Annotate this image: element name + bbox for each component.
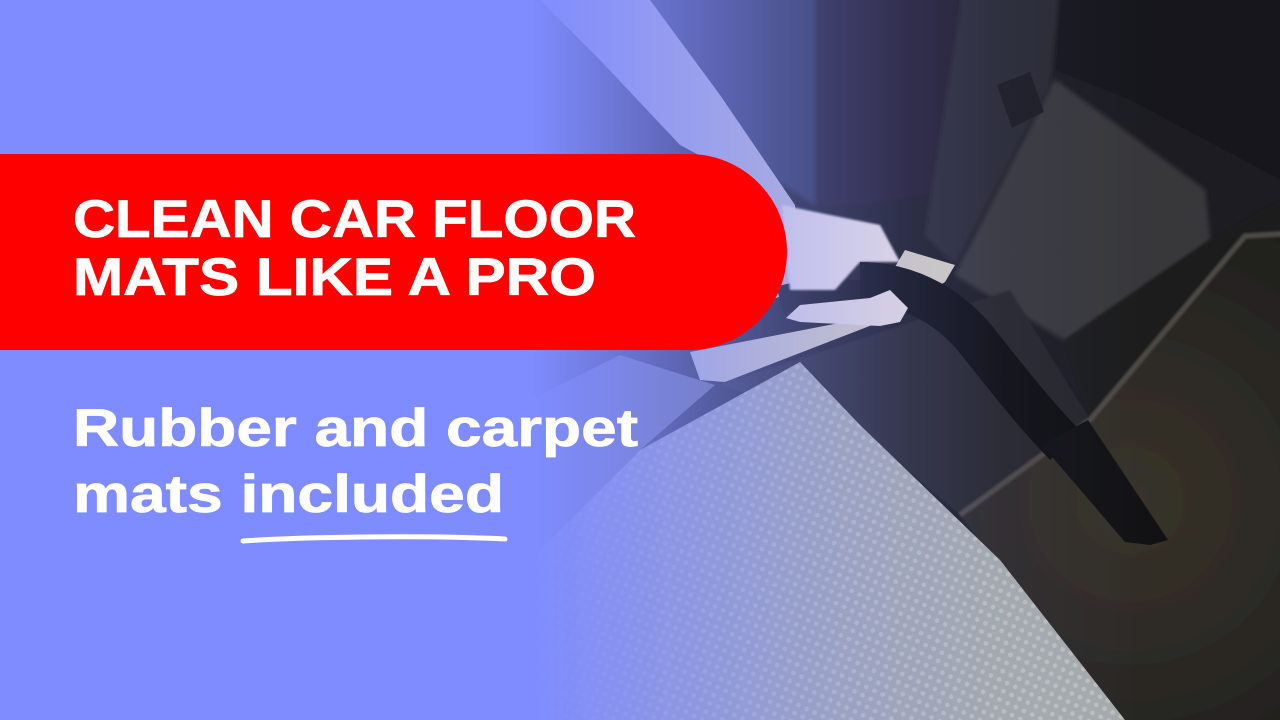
hand-drawn underline [243, 537, 505, 541]
gravel sill [690, 250, 955, 382]
door interior [520, 0, 1280, 720]
seat [530, 362, 1125, 720]
headline text [73, 190, 636, 307]
arm [540, 0, 800, 300]
vacuum hose and nozzle [860, 283, 1168, 545]
seat side [530, 355, 715, 560]
photo: vacuuming a car floor [520, 0, 1280, 720]
vacuum hose left of hand [780, 293, 870, 300]
headline text: CLEAN CAR FLOOR [73, 190, 636, 249]
subheading: Rubber and carpet [73, 399, 638, 458]
subheading [73, 399, 638, 524]
carpet [720, 190, 1280, 720]
headline banner [0, 154, 787, 350]
gradient overlay on photo [510, 0, 1150, 720]
subheading: mats included [73, 465, 504, 524]
hand [782, 205, 900, 290]
headline text: MATS LIKE A PRO [73, 248, 596, 307]
thumb over hose [786, 290, 908, 326]
door hinge bolts [997, 72, 1044, 128]
